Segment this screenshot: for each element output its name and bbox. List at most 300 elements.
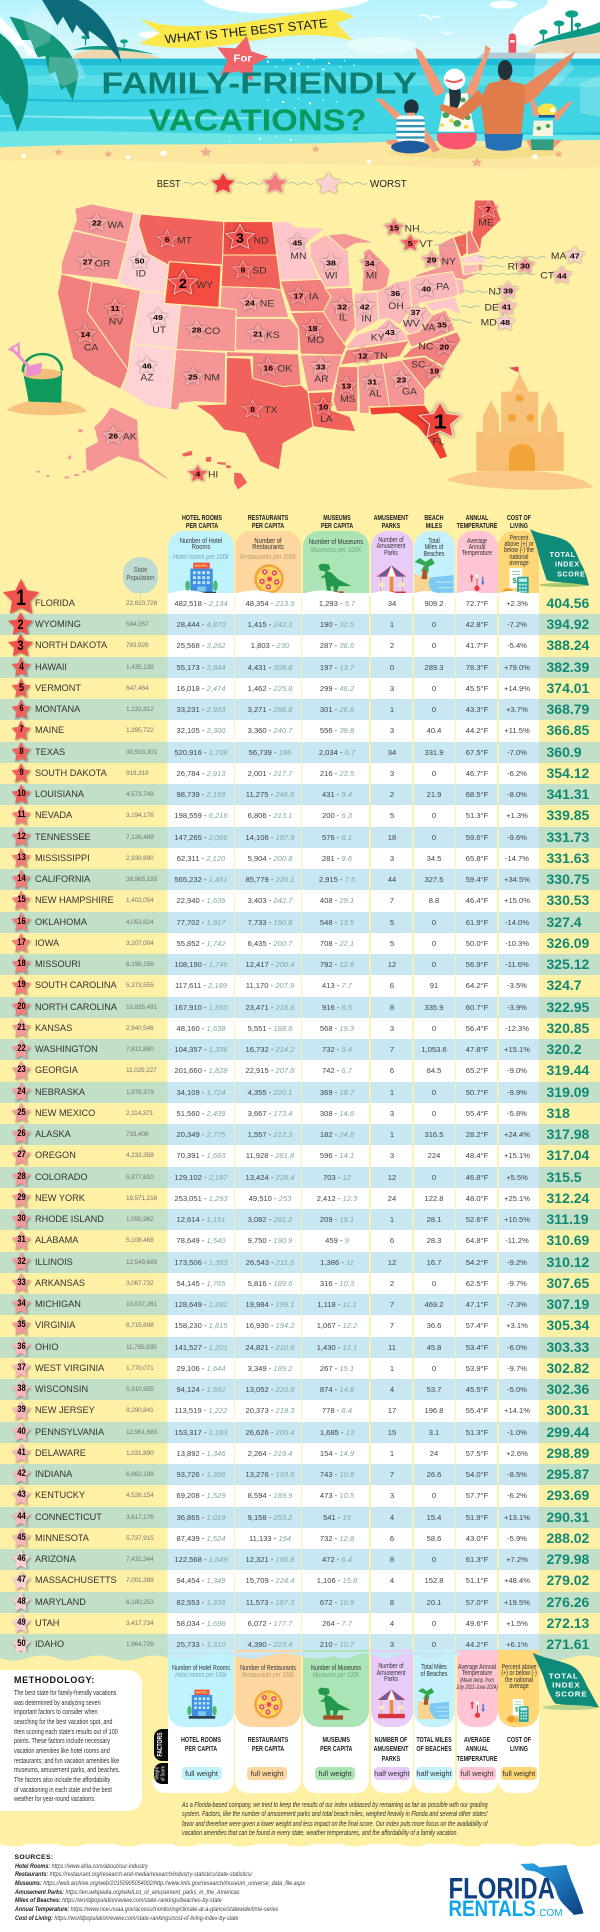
row: New Mexico (0, 1103, 600, 1124)
marker: NJ: NJ (488, 287, 501, 297)
footer title: restaurants: PER CAPITA (252, 1744, 284, 1753)
marker: DE: DE (485, 303, 499, 313)
row: Kansas: 48,160 - 1,638 (176, 1024, 226, 1033)
row: Maryland: 8 (390, 1598, 394, 1606)
row: Delaware: 2,264 - 219.4 (248, 1449, 292, 1458)
row: Idaho: 44.2°F (466, 1640, 488, 1649)
starfish on sand (55, 145, 563, 167)
row: Michigan: 128,649 - 1,282 (174, 1300, 228, 1309)
row: Alaska: 317.98 (546, 1126, 589, 1142)
row: Virginia: 57.4°F (466, 1321, 488, 1330)
row: Arizona: 122,568 - 1,649 (174, 1555, 228, 1564)
marker: UT: 49 (153, 313, 163, 322)
row: Hawaii: 1,435,138 (126, 664, 154, 670)
row: Wyoming (0, 614, 600, 635)
footer text: hotel: Hotel rooms per 100k (175, 1670, 227, 1679)
row: West Virginia: WEST VIRGINIA (35, 1363, 104, 1373)
title line 1: FAMILY-FRIENDLY (101, 65, 417, 100)
marker: CO: 28 (192, 326, 202, 335)
row: Hawaii: 289.3 (424, 662, 444, 672)
row: Indiana: 54.0°F (466, 1470, 488, 1479)
column title: amusement parks: AMUSEMENT (374, 512, 408, 522)
header pill: beach miles (414, 531, 455, 597)
icon: hotel (187, 1690, 217, 1719)
row: Connecticut: 36,865 - 1,019 (176, 1512, 226, 1522)
row: Georgia: 23 (17, 1064, 25, 1075)
marker: AZ: 46 (142, 362, 152, 370)
row: Nebraska: 50.7°F (466, 1088, 488, 1096)
row: Florida: 482,518 - 2,134 (174, 599, 228, 608)
row: Florida: 1,293 - 5.7 (319, 599, 355, 608)
total index score shell: bottom: TOTAL (549, 1672, 579, 1681)
marker: WA: WA (107, 221, 124, 231)
row: Wyoming: 2 (17, 616, 24, 632)
row: Connecticut: 3,617,176 (126, 1514, 154, 1520)
row: South Carolina: 117,611 - 2,189 (175, 981, 227, 990)
icon: beach (418, 1688, 449, 1719)
yellow section bottom wave (0, 1840, 600, 1850)
row: Utah: 49 (17, 1617, 25, 1628)
marker: IL: IL (339, 313, 348, 323)
row: Hawaii: 55,173 - 3,844 (176, 662, 226, 672)
icon: hotel (185, 562, 218, 593)
footer title: amusement: AMUSEMENT (374, 1744, 408, 1753)
row: Illinois: 12,549,689 (126, 1258, 157, 1266)
row: Oregon: 4,233,358 (126, 1152, 154, 1159)
footer text: beach (420, 1662, 448, 1678)
footer title: restaurants (245, 1734, 291, 1754)
row: Vermont: VERMONT (35, 683, 81, 693)
row: New Jersey (0, 1400, 600, 1422)
row: Nevada: 5 (390, 811, 394, 820)
row: Idaho: 0 (432, 1640, 436, 1649)
row: West Virginia: 1,770,071 (126, 1365, 154, 1372)
row: Alabama: 9,750 - 190.9 (248, 1236, 292, 1245)
row: Iowa: 55,852 - 1,742 (176, 939, 226, 948)
row: Arizona: +7.2% (506, 1555, 528, 1564)
row: Iowa: 3,207,004 (126, 940, 154, 947)
birds (419, 15, 441, 19)
marker: AL: 31 (367, 378, 378, 386)
row: Kentucky: 4,526,154 (126, 1492, 154, 1499)
row: Rhode Island: 28.1 (427, 1215, 441, 1224)
band wave under last row (0, 1652, 600, 1660)
footer text: temperature: (Mean temp. from (460, 1678, 494, 1684)
row: Maryland: +19.5% (504, 1598, 530, 1606)
row: Wisconsin: 874 - 14.8 (320, 1385, 354, 1394)
row: Massachusetts: +48.4% (504, 1576, 530, 1585)
row: Mississippi: MISSISSIPPI (35, 853, 90, 863)
row: Rhode Island: 12,614 - 1,151 (176, 1215, 226, 1224)
row: Mississippi: 3 (390, 854, 394, 863)
header text: temperature: Temperature (462, 548, 492, 557)
row: Nevada: 0 (432, 811, 436, 820)
row: South Carolina: 324.7 (546, 977, 582, 993)
marker: NY: NY (442, 257, 457, 267)
map: state shapes (57, 200, 501, 479)
header text: restaurants: Number of (254, 536, 282, 544)
row: Nebraska: 34,109 - 1,724 (176, 1088, 226, 1096)
footer text: restaurants: Number of Restaurants (240, 1662, 296, 1672)
row: Nebraska: NEBRASKA (35, 1086, 85, 1096)
marker: IN: 42 (360, 303, 370, 311)
map: rank stars and state labels (75, 200, 585, 482)
row: Indiana: 6,862,199 (126, 1471, 154, 1478)
row: Nebraska: 1,978,379 (126, 1088, 154, 1096)
row: North Carolina: 335.9 (424, 1002, 444, 1012)
row: North Dakota: 783,926 (126, 642, 148, 649)
row: Michigan: -7.3% (507, 1300, 527, 1309)
column title: beach miles: BEACH (424, 512, 444, 522)
row: Maine: 366.85 (546, 722, 589, 738)
row: Maine: 32,105 - 2,300 (176, 726, 226, 735)
row: Tennessee: 7,126,489 (126, 834, 154, 840)
methodology text: vacation amenities like hotel rooms and (14, 1746, 110, 1755)
row: Arizona: 61.3°F (466, 1555, 488, 1564)
marker: AR: AR (314, 375, 329, 385)
header text: hotel: Number of Hotel (180, 536, 222, 544)
row: Oregon (0, 1145, 600, 1166)
row: Alaska: 182 - 24.8 (320, 1130, 354, 1139)
row: Idaho: 210 - 10.7 (320, 1640, 354, 1649)
methodology text: then scoring each state's results out of 100 (14, 1727, 118, 1736)
row: Kansas: -12.3% (505, 1024, 529, 1033)
row: Georgia: -9.0% (507, 1066, 527, 1075)
row: Virginia: VIRGINIA (35, 1320, 75, 1330)
marker: NC: 20 (439, 343, 450, 351)
column title: annual temperature: TEMPERATURE (457, 521, 497, 530)
row: Vermont: +14.9% (504, 684, 530, 693)
side tab: weight of score: of Score (160, 1766, 166, 1781)
row: Washington: 732 - 9.4 (322, 1045, 352, 1054)
marker: WY: WY (196, 281, 214, 291)
marker: PA: PA (436, 282, 450, 292)
row: Louisiana: -8.0% (507, 790, 527, 799)
row: Delaware (0, 1443, 600, 1464)
row: North Dakota: 388.24 (546, 637, 589, 653)
row: North Dakota: 3 (17, 637, 24, 653)
row: Florida: 72.7°F (466, 599, 488, 608)
row: Wyoming: 28,444 - 4,870 (176, 620, 226, 629)
row: South Dakota: 2,001 - 217.7 (248, 769, 292, 778)
row: Ohio: 53.4°F (466, 1342, 488, 1352)
row: Delaware: 13,892 - 1,346 (176, 1449, 226, 1458)
row: New Jersey: 55.4°F (466, 1406, 488, 1415)
methodology text: weather for year-round vacations. (14, 1794, 95, 1803)
row: Massachusetts: 152.8 (424, 1576, 444, 1585)
row: Maine: 1,395,722 (126, 727, 154, 734)
marker: NH (384, 218, 420, 235)
row: Wyoming: 190 - 32.5 (320, 620, 354, 629)
row: California: 565,232 - 1,451 (174, 875, 228, 884)
marker: WY (168, 270, 214, 294)
row: Florida: +2.3% (506, 599, 528, 608)
row: Wyoming: 584,057 (126, 621, 148, 628)
marker: VA: 35 (437, 321, 447, 330)
row: Vermont: 299 - 46.2 (320, 684, 354, 693)
row: Ohio: 1,430 - 12.1 (317, 1342, 357, 1352)
header text: beach: Beaches (423, 549, 445, 558)
marker: OR: 27 (83, 258, 93, 266)
map: US states ranked (7, 200, 593, 490)
row: Tennessee: 0 (432, 832, 436, 842)
row: Minnesota: 45 (17, 1532, 25, 1543)
weight pill: cost: full weight (502, 1769, 535, 1778)
row: Maine: +11.5% (504, 726, 530, 735)
row: Colorado: 46.8°F (466, 1172, 488, 1182)
row: Vermont: 5 (19, 682, 23, 694)
row: Maryland: 20.1 (427, 1598, 441, 1606)
sources list: Miles of Beaches: https://worldpopulationreview.com/state-rankings/beaches-by-state (14, 1897, 221, 1904)
total index score shell: bottom (0, 1580, 600, 1770)
weight pill: beach: half weight (416, 1769, 452, 1778)
methodology text: The best state for family-friendly vacations (14, 1688, 116, 1697)
marker: RI (508, 256, 535, 273)
row: Virginia: 305.34 (546, 1317, 589, 1333)
row: Wyoming: 394.92 (546, 616, 589, 632)
note: methodology disclaimer: vacation amenities that can be found in every state, weather temperatures, and the affordability of a family vacation. (182, 1828, 458, 1837)
table header: state population bubble (123, 557, 158, 594)
row: Alaska: 1,557 - 212.3 (248, 1130, 292, 1139)
row: Maine: 556 - 39.8 (320, 726, 354, 735)
row: Tennessee: -9.6% (507, 832, 527, 842)
row: Minnesota: 58.6 (427, 1534, 441, 1543)
total index score shell: top: INDEX (555, 562, 580, 569)
marker: CO (186, 321, 221, 338)
row: Nebraska: 4,355 - 220.1 (248, 1088, 292, 1096)
marker: SC: SC (411, 360, 425, 370)
row: Alabama: 78,649 - 1,540 (176, 1236, 226, 1245)
header pill: cost of living (498, 531, 539, 597)
row: New Jersey: 113,519 - 1,222 (175, 1406, 227, 1415)
row: Mississippi: 65.8°F (466, 854, 488, 863)
row: South Dakota: SOUTH DAKOTA (35, 768, 107, 778)
row: Idaho: 1,964,726 (126, 1641, 154, 1648)
marker: IA (288, 287, 319, 304)
row: Iowa: 17 (17, 937, 25, 948)
methodology text: was determined by analyzing seven (14, 1698, 101, 1707)
marker: OH: 36 (390, 289, 401, 298)
row: Nebraska: -9.9% (507, 1088, 527, 1096)
footer text: hotel: Number of Hotel Rooms (172, 1662, 230, 1672)
row: Vermont: 374.01 (546, 680, 589, 696)
column title: amusement parks (374, 512, 408, 530)
row: Michigan: 1,118 - 11.1 (317, 1300, 357, 1309)
row: New Mexico: 318 (546, 1105, 570, 1121)
marker: TN (353, 346, 388, 363)
marker: ME (478, 200, 498, 228)
row: Utah: UTAH (35, 1618, 59, 1628)
column title: restaurants (248, 512, 288, 530)
row: Montana: MONTANA (35, 704, 80, 714)
row: Oklahoma: -14.0% (505, 918, 529, 926)
row: Illinois: 26,543 - 211.5 (246, 1258, 294, 1266)
row: Hawaii: +79.0% (504, 662, 530, 672)
row: Massachusetts: 7,001,399 (126, 1577, 154, 1584)
row: Connecticut: 51.9°F (466, 1512, 488, 1522)
row: New York (0, 1188, 600, 1209)
note: methodology disclaimer: system. Factors, like the number of amusement parks and total beach miles, weighed heavily in Florida and several other states' (182, 1809, 488, 1818)
row: Arkansas: 0 (432, 1279, 436, 1288)
footer pill: beach (414, 1650, 455, 1727)
logo: Florida Rentals: FLORIDA (448, 1871, 555, 1905)
row: Vermont (0, 678, 600, 699)
marker: TN: TN (374, 352, 388, 362)
row: Montana: 33,231 - 2,933 (176, 705, 226, 714)
row: Colorado: 315.5 (546, 1168, 582, 1184)
marker: MS (336, 377, 356, 405)
marker: TX: TX (264, 406, 278, 416)
row: Missouri: -11.6% (505, 960, 529, 969)
row: Virginia: 1,067 - 12.2 (317, 1321, 357, 1330)
header text: amusement: Amusement (377, 541, 405, 550)
row: North Dakota (0, 635, 600, 656)
row: Minnesota (0, 1528, 600, 1549)
row: Kansas: 3 (390, 1024, 394, 1033)
row: Vermont: 16,018 - 2,474 (176, 684, 226, 693)
figure: mother (415, 45, 491, 149)
row: Hawaii: 4 (19, 660, 23, 672)
row: Massachusetts: 1,106 - 15.8 (317, 1576, 357, 1585)
row: Maine: 3,360 - 240.7 (248, 726, 292, 735)
row: West Virginia (0, 1358, 600, 1379)
map: sandcastle (447, 367, 593, 490)
row: Alaska: 26 (17, 1128, 25, 1139)
column title: hotel rooms (182, 512, 222, 530)
row: North Carolina: 20 (17, 1000, 25, 1012)
row: Utah: 58,034 - 1,698 (176, 1619, 226, 1628)
row: South Dakota: 0 (432, 769, 436, 778)
row: Montana (0, 699, 600, 720)
row: California: 44 (388, 875, 396, 884)
legend: best to worst (157, 173, 407, 193)
marker: CO: CO (205, 327, 221, 337)
methodology text: The factors also include the affordability (14, 1775, 110, 1784)
row: Montana: 43.3°F (466, 705, 488, 714)
row: Alabama: 64.8°F (466, 1236, 488, 1245)
marker: TX (242, 400, 278, 417)
header text: cost: below (-) the (504, 545, 534, 554)
row: Massachusetts (0, 1570, 600, 1592)
marker: CA (75, 325, 99, 353)
row: Louisiana: 341.31 (546, 786, 589, 802)
row: Iowa (0, 933, 600, 954)
row: Georgia: 201,660 - 1,828 (174, 1066, 228, 1075)
weight pill: museums (315, 1767, 355, 1780)
row: Texas: TEXAS (35, 746, 65, 756)
row: Kansas: 21 (17, 1022, 25, 1033)
row: Missouri: 792 - 12.8 (320, 960, 354, 969)
sea (0, 59, 600, 149)
row: Arkansas: 33 (17, 1277, 25, 1288)
row: North Carolina: NORTH CAROLINA (35, 1002, 117, 1012)
row: South Carolina: 11,170 - 207.9 (246, 981, 294, 990)
marker: AK: AK (123, 432, 137, 442)
side tab: weight of score (154, 1763, 168, 1784)
footer text: cost: average (509, 1681, 529, 1690)
footer text: amusement: Parks (384, 1674, 398, 1683)
row: Massachusetts: 279.02 (546, 1572, 589, 1588)
footer title: cost (498, 1734, 540, 1754)
row: Vermont: 0 (432, 684, 436, 693)
marker: MN: MN (290, 252, 307, 262)
row: New York: 122.8 (424, 1194, 444, 1203)
marker: MN: 45 (292, 239, 303, 247)
row: Pennsylvania: PENNSYLVANIA (35, 1426, 104, 1436)
row: Delaware: 154 - 14.9 (320, 1449, 354, 1458)
row: North Dakota: 25,568 - 3,262 (176, 641, 226, 650)
column title: amusement parks: PARKS (382, 521, 400, 530)
row: North Carolina: 60.7°F (466, 1002, 488, 1012)
row: Rhode Island: 311.19 (546, 1211, 589, 1227)
footer title: hotel: HOTEL ROOMS (181, 1734, 221, 1744)
row: Minnesota: 87,439 - 1,524 (176, 1534, 226, 1543)
row: California: 38,965,193 (126, 876, 157, 883)
marker: MA (551, 246, 585, 263)
row: New Hampshire (0, 890, 600, 912)
marker: MT: 6 (165, 235, 170, 244)
marker: MT: MT (177, 236, 192, 246)
marker: ID: 50 (135, 257, 145, 266)
row: Arizona: 46 (17, 1553, 25, 1564)
row: Delaware: DELAWARE (35, 1448, 86, 1458)
row: Wyoming: -7.2% (507, 620, 527, 629)
marker: OR (77, 252, 110, 269)
row: California: +34.5% (504, 875, 530, 884)
row: Connecticut: 290.31 (546, 1508, 589, 1524)
icon: dinosaur (318, 564, 352, 593)
row: Maryland: 276.26 (546, 1594, 589, 1610)
header text: amusement: Number of (378, 534, 404, 544)
row: Michigan: 307.19 (546, 1296, 589, 1312)
sparkles on sea (229, 59, 355, 142)
marker: MI: MI (366, 271, 377, 281)
row: Maryland: 48 (17, 1596, 25, 1606)
icon: calculator (504, 1699, 533, 1723)
header text: amusement: Parks (384, 548, 398, 556)
row: Ohio: 36 (17, 1340, 25, 1352)
row: Michigan: MICHIGAN (35, 1299, 81, 1309)
row: Delaware: 1,031,890 (126, 1450, 154, 1457)
row: Arizona: 472 - 6.4 (322, 1555, 352, 1564)
header text: cost: average (509, 558, 529, 567)
marker: MO: 18 (308, 324, 318, 333)
row: California (0, 869, 600, 890)
column title: restaurants: RESTAURANTS (248, 512, 288, 522)
row: Vermont: 647,464 (126, 685, 148, 692)
marker: IA: IA (309, 292, 319, 302)
row: Idaho: 25,733 - 1,310 (176, 1640, 226, 1649)
header pill: museums (302, 531, 369, 597)
island: right with lighthouse (476, 10, 600, 59)
logo: Florida Rentals: .COM (536, 1908, 563, 1919)
marker: GA (391, 371, 417, 397)
methodology text: searching for the best vacation spot, and (14, 1717, 112, 1726)
weight pill: temperature: full weight (461, 1769, 493, 1778)
row: Louisiana (0, 784, 600, 805)
header text: beach (423, 536, 445, 558)
row: Tennessee: 18 (388, 832, 396, 842)
row: New Jersey: 300.31 (546, 1402, 589, 1418)
lens flare shapes (534, 50, 574, 87)
row: New Jersey: 39 (17, 1404, 25, 1415)
row: Ohio: 303.33 (546, 1338, 589, 1354)
icon: thermometer (470, 574, 484, 591)
row: Virginia: 16,930 - 194.2 (246, 1321, 294, 1330)
row: Alabama: 31 (17, 1234, 25, 1245)
marker: NE: 24 (245, 299, 255, 307)
row: South Carolina (0, 975, 600, 996)
